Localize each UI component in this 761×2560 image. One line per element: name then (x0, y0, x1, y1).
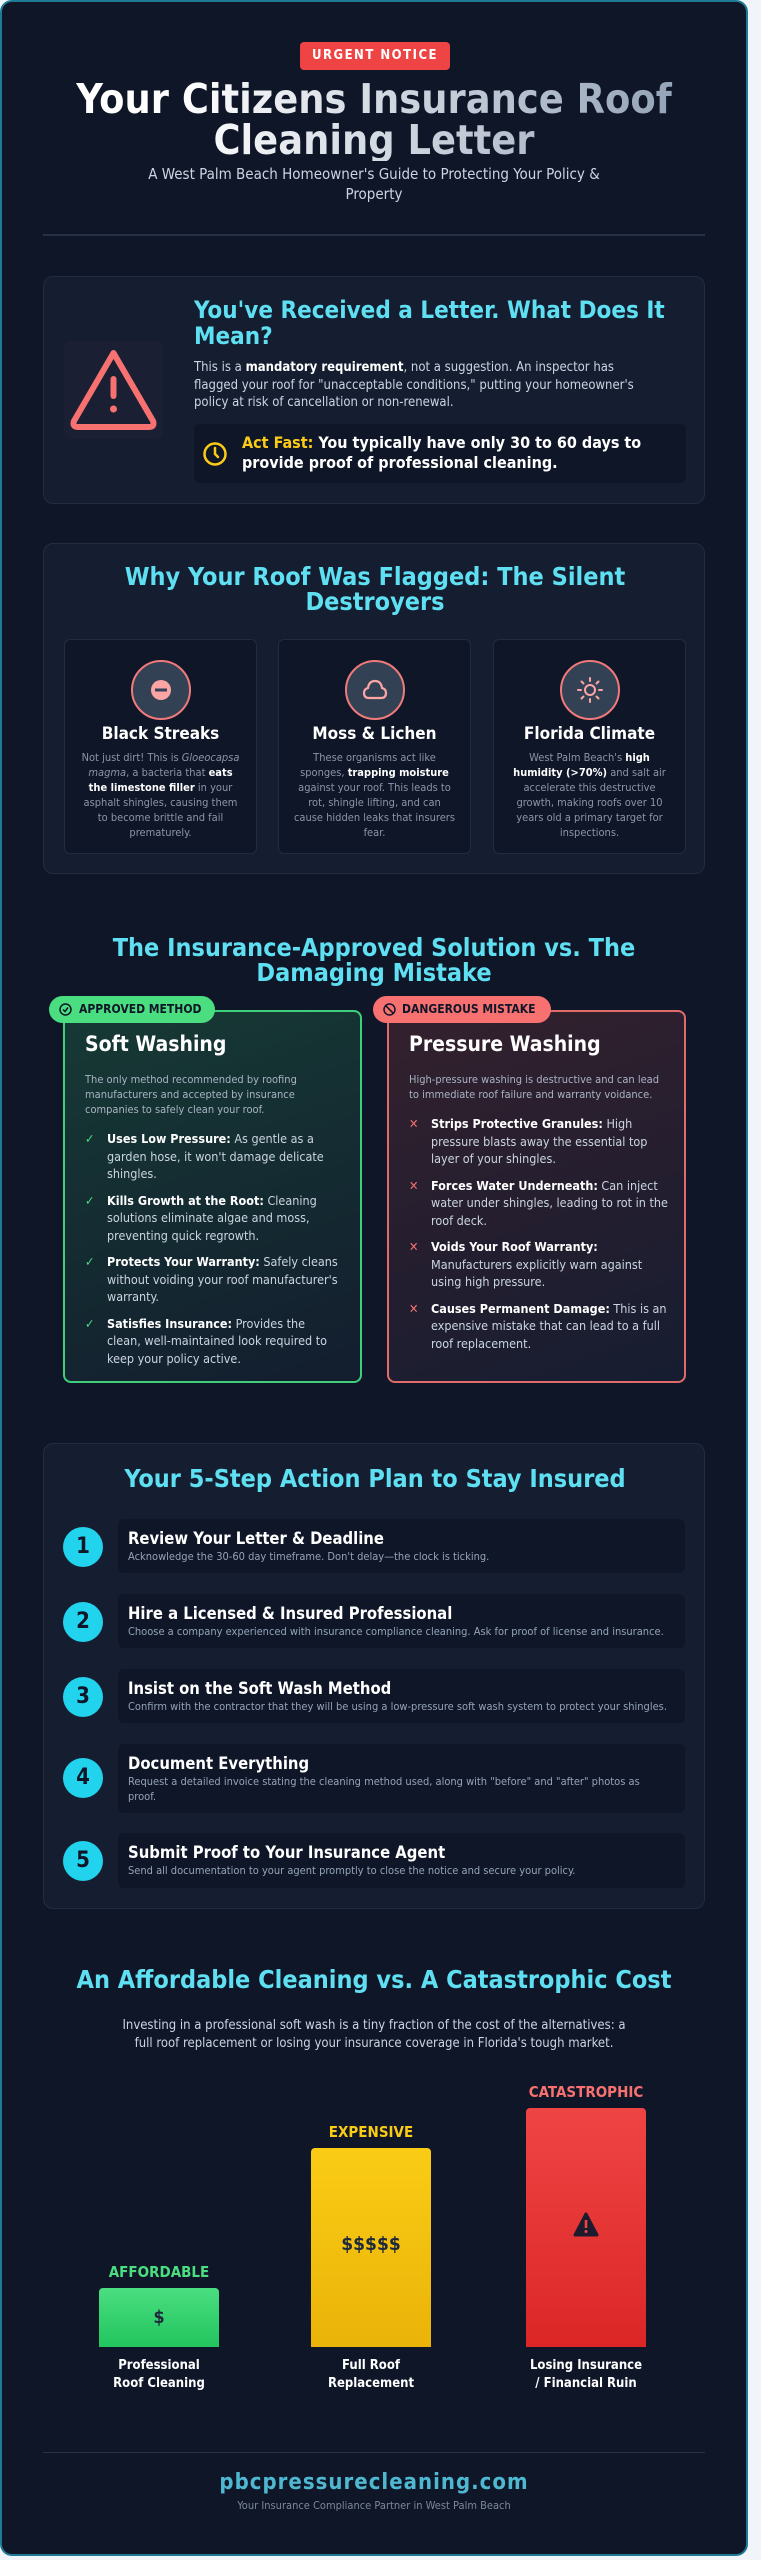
text: Review Your Letter & Deadline (128, 1529, 384, 1548)
list: benefits: Satisfies Insurance: Provides the clean, well-maintained look required to keep your policy active. (107, 1316, 327, 1366)
icon: cloud (344, 660, 404, 720)
step 3 (63, 1669, 685, 1722)
bar chart: / Financial Ruin (535, 2376, 637, 2390)
list: benefits: Uses Low Pressure: As gentle as a garden hose, it won't damage delicate shingles. (107, 1131, 324, 1181)
bar chart: Professional (118, 2358, 200, 2373)
list: benefits: ✓ (85, 1192, 94, 1208)
badge: urgent notice: URGENT NOTICE (312, 48, 438, 63)
list: dangers: Causes Permanent Damage: This is an expensive mistake that can lead to a full roof replacement. (431, 1300, 667, 1350)
badge: approved method (49, 996, 215, 1023)
panel: 5-step plan (43, 1443, 705, 1909)
sub-card: climate (493, 639, 686, 854)
list: benefits: ✓ (85, 1254, 94, 1269)
callout: act fast (194, 424, 686, 483)
sub-card: black streaks: Black Streaks (102, 724, 219, 744)
icon: minus circle (130, 660, 190, 720)
list: benefits (85, 1131, 338, 1366)
panel: letter meaning (43, 276, 705, 504)
bar chart: Roof Cleaning (113, 2376, 205, 2390)
subtitle: A West Palm Beach Homeowner's Guide to Protecting Your Policy & Property (148, 165, 600, 203)
heading: solution vs mistake: The Insurance-Approved Solution vs. The Damaging Mistake (113, 933, 635, 987)
text: Document Everything (128, 1754, 309, 1773)
panel: pressure washing (387, 1010, 686, 1383)
text: Request a detailed invoice stating the cleaning method used, along with "before" and "after" photos as proof. (128, 1775, 640, 1803)
list: benefits: Kills Growth at the Root: Cleaning solutions eliminate algae and moss, preventing quick regrowth. (107, 1192, 317, 1242)
text: Confirm with the contractor that they will be using a low-pressure soft wash system to protect your shingles. (128, 1700, 667, 1713)
step 1 (63, 1519, 685, 1572)
text: cost intro: Investing in a professional soft wash is a tiny fraction of the cost of the alternatives: a full roof replacement or losing your insurance coverage in Florida's tough market. (122, 2018, 626, 2050)
panel: soft washing (63, 1010, 362, 1383)
step 2 (63, 1594, 685, 1647)
title: Your Citizens Insurance Roof Cleaning Letter (76, 75, 672, 164)
list: dangers: ✕ (409, 1178, 418, 1192)
list: benefits: Protects Your Warranty: Safely cleans without voiding your roof manufacturer's warranty. (107, 1254, 338, 1304)
badge: dangerous mistake (373, 996, 551, 1023)
panel: pressure washing: Pressure Washing (409, 1032, 601, 1056)
badge: urgent notice (300, 42, 450, 70)
list: dangers: Forces Water Underneath: Can inject water under shingles, leading to rot in the roof deck. (431, 1178, 668, 1228)
bar chart (99, 2083, 646, 2390)
bar chart: EXPENSIVE (329, 2123, 413, 2141)
list: dangers (409, 1116, 668, 1350)
callout: act fast: Act Fast: You typically have only 30 to 60 days to provide proof of professional cleaning. (242, 433, 641, 472)
text: 3 (76, 1684, 90, 1709)
heading: Why Your Roof Was Flagged: The Silent Destroyers (125, 562, 625, 616)
list: dangers: ✕ (409, 1300, 418, 1316)
list: dangers: ✕ (409, 1116, 418, 1131)
badge: approved method: APPROVED METHOD (79, 1002, 201, 1016)
sub-card: moss: Moss & Lichen (312, 724, 437, 744)
panel: soft washing: The only method recommended by roofing manufacturers and accepted by insurance companies to safely clean your roof. (85, 1073, 297, 1116)
list: benefits: ✓ (85, 1131, 94, 1146)
text: 2 (76, 1609, 90, 1634)
text: Hire a Licensed & Insured Professional (128, 1604, 452, 1623)
list: dangers: Strips Protective Granules: High pressure blasts away the essential top layer of your shingles. (431, 1116, 647, 1166)
sub-card: climate: Florida Climate (524, 724, 655, 744)
sub-card: moss (278, 639, 471, 854)
text: Send all documentation to your agent promptly to close the notice and secure your policy. (128, 1864, 575, 1877)
bar chart: $ (153, 2307, 165, 2328)
sub-card: climate: West Palm Beach's high humidity (>70%) and salt air accelerate this destructive growth, making roofs over 10 years old a primary target for inspections. (513, 751, 666, 839)
badge: dangerous mistake: DANGEROUS MISTAKE (402, 1002, 535, 1016)
bar chart: Replacement (328, 2376, 414, 2390)
panel: pressure washing: High-pressure washing is destructive and can lead to immediate roof failure and warranty voidance. (409, 1073, 659, 1101)
step 5 (63, 1833, 685, 1887)
text: Acknowledge the 30-60 day timeframe. Don't delay—the clock is ticking. (128, 1550, 489, 1563)
text block: This is a mandatory requirement, not a suggestion. An inspector has flagged your roof for "unacceptable conditions," putting your homeowner's policy at risk of cancellation or non-renewal. (194, 360, 634, 410)
sub-card: black streaks: Not just dirt! This is Gloeocapsa magma, a bacteria that eats the limestone filler in your asphalt shingles, causing them to become brittle and fail prematurely. (82, 751, 239, 839)
list: dangers: Voids Your Roof Warranty: Manufacturers explicitly warn against using high pressure. (431, 1239, 642, 1289)
footer: pbcpressurecleaning.com (219, 2470, 529, 2495)
text: 1 (76, 1534, 90, 1559)
text: 5 (76, 1848, 90, 1873)
text: Submit Proof to Your Insurance Agent (128, 1843, 445, 1862)
text: Choose a company experienced with insurance compliance cleaning. Ask for proof of license and insurance. (128, 1625, 664, 1638)
heading: You've Received a Letter. What Does It Mean? (194, 296, 665, 350)
text: 4 (76, 1765, 90, 1790)
bar chart: CATASTROPHIC (529, 2083, 643, 2101)
footer (219, 2470, 529, 2512)
step 4 (63, 1744, 685, 1812)
bar chart: AFFORDABLE (109, 2263, 209, 2281)
icon: warning triangle (64, 341, 163, 439)
sub-card: moss: These organisms act like sponges, trapping moisture against your roof. This leads to rot, shingle lifting, and can cause hidden leaks that insurers fear. (294, 751, 455, 839)
bar chart: Losing Insurance (530, 2358, 642, 2373)
text: Insist on the Soft Wash Method (128, 1679, 391, 1698)
list: benefits: ✓ (85, 1316, 94, 1330)
panel: soft washing: Soft Washing (85, 1032, 226, 1056)
heading: Your 5-Step Action Plan to Stay Insured (124, 1464, 626, 1493)
bar chart: $$$$$ (341, 2233, 401, 2255)
heading: cost: An Affordable Cleaning vs. A Catastrophic Cost (77, 1965, 671, 1994)
panel: why flagged (43, 543, 705, 874)
bar chart: Full Roof (342, 2358, 400, 2373)
icon: sun (560, 660, 620, 720)
sub-card: black streaks (64, 639, 257, 854)
list: dangers: ✕ (409, 1239, 418, 1254)
footer: Your Insurance Compliance Partner in West Palm Beach (237, 2499, 511, 2512)
